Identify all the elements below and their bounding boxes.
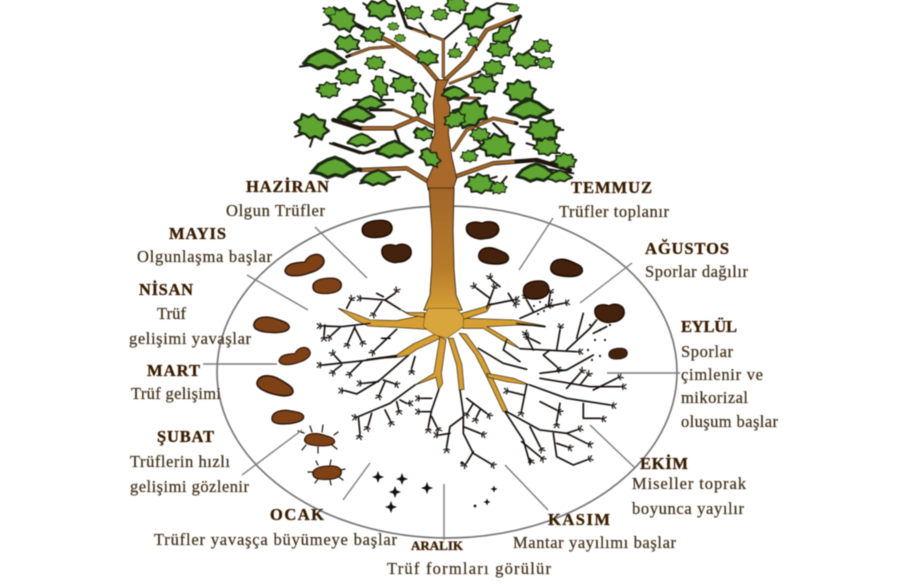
spores and stars [372,299,611,513]
truffle: mart 1 [279,348,310,365]
soil ellipse [217,206,677,538]
label: eylül: oluşum başlar [681,412,778,431]
truffle: mayıs 2 [313,278,341,294]
truffle: temmuz 2 [479,248,509,264]
truffle: eylül 2 [609,348,627,359]
label: ağustos: AĞUSTOS [645,239,729,258]
label: haziran: Olgun Trüfler [226,201,326,220]
tree crown [291,0,576,194]
branches outline [330,3,570,182]
spiky truffle 2 [308,460,345,485]
label: aralık: ARALIK [411,538,464,553]
label: mayıs: MAYIS [169,224,226,243]
rootlet forks [317,273,626,469]
label: kasım [513,510,676,552]
label: eylül: Sporlar [681,342,734,361]
label: temmuz: Trüfler toplanır [559,202,670,221]
label: ekim: Miseller toprak [632,474,747,493]
label: aralık [387,538,552,578]
truffle: mayıs 1 [285,255,324,276]
label: mayıs [137,224,272,266]
truffle: temmuz 1 [467,222,499,239]
label: eylül: EYLÜL [681,317,737,336]
label: eylül [681,317,778,431]
upper trunk [427,80,457,190]
label: kasım: Mantar yayılımı başlar [513,533,676,552]
leaves [291,0,576,194]
dark twigs [295,0,573,193]
label: aralık: Trüf formları görülür [387,559,552,578]
label: şubat: ŞUBAT [157,427,214,446]
truffle: haziran 2 [382,244,411,262]
label: eylül: çimlenir ve [681,365,763,384]
label: nisan: gelişimi yavaşlar [129,329,252,348]
truffle: ağustos 2 [523,281,549,299]
truffle: haziran 1 [362,220,392,238]
root system [317,273,626,469]
truffle: mart 3 [271,408,304,426]
lower trunk [424,188,462,310]
label: şubat: Trüflerin hızlı [130,452,230,471]
label: ağustos: Sporlar dağılır [645,262,748,281]
label: kasım: KASIM [548,510,610,529]
truffle: nisan [254,317,289,333]
truffle: ağustos 1 [551,259,582,276]
label: temmuz [559,178,670,221]
leader lines [203,218,680,540]
branches wood [352,18,513,182]
truffle: eylül 1 [595,304,624,322]
label: haziran: HAZİRAN [246,177,329,196]
label: ekim: EKİM [640,454,688,473]
label: nisan: Trüf [157,304,186,323]
spiky truffle 1 [298,425,338,453]
label: temmuz: TEMMUZ [571,178,652,197]
fine rootlets [323,280,620,465]
label: eylül: mikorizal [681,388,748,407]
gold roots [338,303,545,412]
tree [291,0,576,310]
label: mart: MART [147,361,200,380]
label: nisan [129,280,252,348]
label: ağustos [645,239,748,281]
label: ocak [154,505,398,549]
label: ocak: OCAK [270,505,324,524]
label: mart: Trüf gelişimi [131,384,221,403]
label: şubat [130,427,250,496]
label: mart [131,361,221,403]
label: mayıs: Olgunlaşma başlar [137,247,272,266]
root crown [423,308,463,338]
label: ekim: boyunca yayılır [632,499,744,518]
label: şubat: gelişimi gözlenir [130,477,250,496]
label: nisan: NİSAN [139,280,193,299]
label: ocak: Trüfler yavaşça büyümeye başlar [154,530,398,549]
truffle: mart 2 [255,374,295,398]
leaves over trunk [415,87,468,170]
label: haziran [226,177,329,220]
label: ekim [632,454,747,518]
